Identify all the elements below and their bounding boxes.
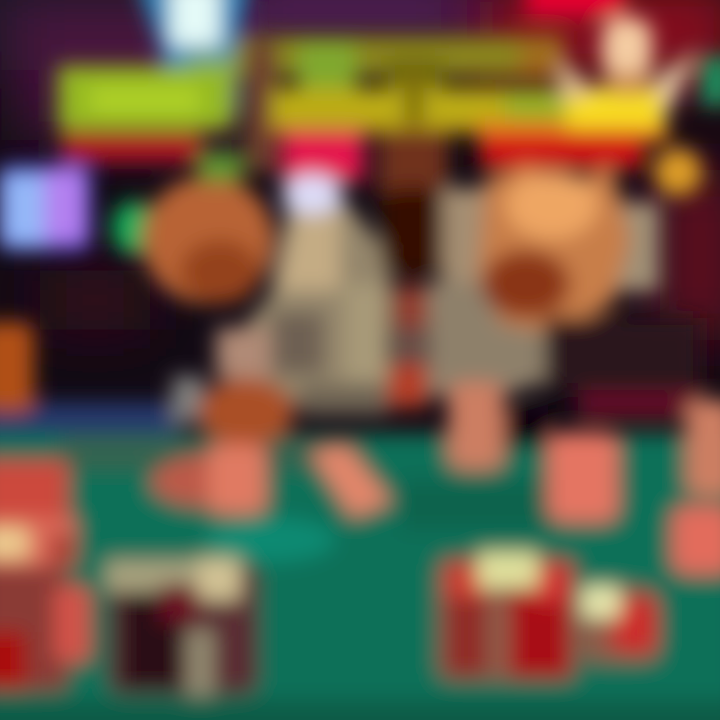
person: right raised fist — [478, 164, 630, 334]
person: center beard — [378, 130, 448, 408]
sign red and pink underside — [62, 0, 644, 182]
game table felt — [0, 434, 720, 720]
green light — [112, 201, 156, 255]
orange glow — [0, 322, 34, 412]
hand: center fingers — [448, 382, 504, 470]
dark clothing right — [492, 318, 703, 446]
hand: left fingers — [152, 444, 392, 518]
green light top right — [700, 56, 720, 106]
chip stack: left — [0, 460, 90, 690]
person: right shirt — [428, 188, 660, 396]
neon blue and purple light — [0, 164, 92, 252]
sign brown column — [246, 40, 276, 172]
person: left raised fist — [142, 152, 274, 304]
hand: left wrist — [172, 328, 294, 446]
cyan spotlight — [136, 0, 250, 114]
hand: right fingers — [548, 400, 720, 574]
chip stack: middle — [106, 558, 258, 696]
gold coin — [654, 148, 702, 196]
sign upper row — [234, 36, 564, 90]
sign lower row — [58, 66, 668, 142]
mascot figure top right — [560, 18, 698, 116]
chip stack: right — [438, 552, 658, 680]
blue table edge — [0, 402, 180, 434]
person: left shirt — [224, 174, 390, 415]
